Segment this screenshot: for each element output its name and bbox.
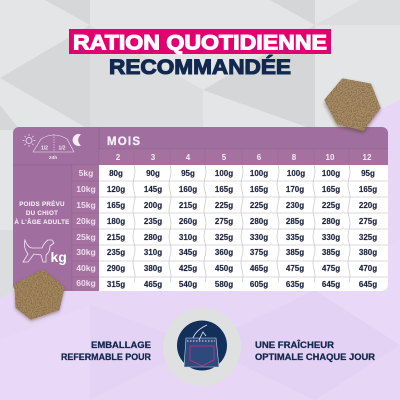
- row 25kg values: 310g: [179, 233, 197, 242]
- side label: expected adult weight: À L'ÂGE ADULTE: [14, 219, 70, 226]
- row 10kg values: 165g: [322, 185, 340, 194]
- row 15kg values: 230g: [286, 201, 304, 210]
- side label: expected adult weight: POIDS PRÉVU: [19, 200, 65, 208]
- row 30kg values: 310g: [144, 248, 162, 257]
- caption right: UNE FRAÎCHEUR: [255, 339, 335, 350]
- row 20kg values: 260g: [179, 217, 197, 226]
- table header: months: 3: [151, 153, 156, 162]
- row 30kg values: 375g: [250, 248, 268, 257]
- weight column: 30kg: [76, 247, 96, 257]
- row 30kg values: 360g: [215, 248, 233, 257]
- row 15kg values: 165g: [107, 201, 125, 210]
- navy circle: [177, 320, 227, 370]
- row 5kg values: 100g: [287, 169, 305, 178]
- row 60kg values: 580g: [215, 280, 233, 289]
- pouch: [184, 338, 219, 367]
- title highlight: ration quotidienne: RATION QUOTIDIENNE: [73, 32, 327, 54]
- row 25kg values: 335g: [286, 233, 304, 242]
- icon: day and night half split: 1/2: [59, 146, 66, 152]
- icon: dog with kg: kg: [50, 249, 67, 265]
- row 25kg values: 325g: [359, 233, 377, 242]
- white table body: [99, 165, 388, 291]
- row 20kg values: 285g: [286, 217, 304, 226]
- table header: months: 4: [186, 153, 191, 162]
- row 40kg values: 380g: [144, 264, 162, 273]
- title second line: recommandée: RECOMMANDÉE: [109, 56, 291, 79]
- row 10kg values: 165g: [250, 185, 268, 194]
- row 20kg values: 275g: [215, 217, 233, 226]
- table header: months: 8: [292, 153, 297, 162]
- row 15kg values: 225g: [322, 201, 340, 210]
- row 5kg values: 100g: [215, 169, 233, 178]
- weight column: 5kg: [79, 168, 93, 178]
- row 20kg values: [107, 217, 377, 226]
- row 10kg values: [107, 185, 377, 194]
- table header: months: [13, 127, 388, 165]
- row 40kg values: 425g: [179, 264, 197, 273]
- row 30kg values: 380g: [359, 248, 377, 257]
- row 60kg values: 635g: [286, 280, 304, 289]
- row 15kg values: 220g: [359, 201, 377, 210]
- side label: expected adult weight: DU CHIOT: [26, 210, 58, 217]
- table header: months: 2: [116, 153, 121, 162]
- row 10kg values: 165g: [215, 185, 233, 194]
- table panel: [13, 127, 388, 291]
- kibble: bottom left: [16, 271, 63, 320]
- row 5kg values: 95g: [181, 169, 195, 178]
- row 5kg values: 80g: [109, 169, 123, 178]
- row 60kg values: 645g: [359, 280, 377, 289]
- table header: months: 6: [257, 153, 262, 162]
- caption left: [61, 340, 151, 362]
- row 20kg values: 275g: [359, 217, 377, 226]
- weight column: 20kg: [76, 216, 96, 226]
- row 30kg values: 235g: [107, 248, 125, 257]
- side label: expected adult weight: [14, 200, 70, 226]
- row 5kg values: [109, 169, 375, 178]
- weight column: 40kg: [76, 263, 96, 273]
- icon: day and night half split: 24h: [49, 155, 57, 161]
- table header: months: 12: [363, 153, 372, 162]
- row 10kg values: 165g: [359, 185, 377, 194]
- hand outline: [193, 325, 207, 340]
- row 5kg values: 95g: [361, 169, 375, 178]
- row 20kg values: 180g: [107, 217, 125, 226]
- row 15kg values: 225g: [215, 201, 233, 210]
- icon: resealable pack: [163, 308, 241, 386]
- kibble: top right: [326, 80, 379, 132]
- row 60kg values: 465g: [144, 280, 162, 289]
- row 5kg values: 100g: [322, 169, 340, 178]
- table header: months: 5: [222, 153, 227, 162]
- row 30kg values: 345g: [179, 248, 197, 257]
- row 40kg values: 290g: [107, 264, 125, 273]
- row 25kg values: 325g: [215, 233, 233, 242]
- icon: dog with kg: [23, 240, 67, 265]
- row 20kg values: 280g: [250, 217, 268, 226]
- table grid lines: [99, 181, 388, 277]
- weight column: 60kg: [76, 278, 96, 288]
- row 25kg values: 215g: [107, 233, 125, 242]
- row 15kg values: [107, 201, 377, 210]
- row 25kg values: [107, 233, 377, 242]
- weight column: 25kg: [76, 232, 96, 242]
- row 15kg values: 215g: [179, 201, 197, 210]
- table header: months: MOIS: [107, 136, 141, 148]
- row 60kg values: 315g: [107, 280, 125, 289]
- row 10kg values: 170g: [286, 185, 304, 194]
- icon: day and night half split: [22, 134, 81, 161]
- pink inner outline: [190, 346, 214, 366]
- row 40kg values: 475g: [286, 264, 304, 273]
- row 15kg values: 200g: [144, 201, 162, 210]
- table header: months: 10: [326, 153, 335, 162]
- row 40kg values: 450g: [215, 264, 233, 273]
- row 20kg values: 235g: [144, 217, 162, 226]
- row 25kg values: 330g: [250, 233, 268, 242]
- row 40kg values: 465g: [250, 264, 268, 273]
- row 60kg values: 605g: [250, 280, 268, 289]
- row 5kg values: 100g: [250, 169, 268, 178]
- row 15kg values: 225g: [250, 201, 268, 210]
- caption left: EMBALLAGE: [91, 340, 151, 350]
- title: [69, 29, 331, 79]
- caption right: OPTIMALE CHAQUE JOUR: [255, 352, 376, 362]
- row 60kg values: 540g: [179, 280, 197, 289]
- feeding table: [13, 127, 388, 291]
- caption right: [255, 339, 376, 362]
- row 5kg values: 90g: [146, 169, 160, 178]
- row 30kg values: 385g: [286, 248, 304, 257]
- row 10kg values: 145g: [144, 185, 162, 194]
- row 60kg values: 645g: [322, 280, 340, 289]
- row 30kg values: [107, 248, 377, 257]
- weight column: [72, 165, 99, 291]
- weight column: 15kg: [76, 200, 96, 210]
- row 40kg values: 475g: [322, 264, 340, 273]
- row 10kg values: 120g: [107, 185, 125, 194]
- row 25kg values: 330g: [322, 233, 340, 242]
- row 10kg values: 160g: [179, 185, 197, 194]
- weight column: 10kg: [76, 184, 96, 194]
- icon: day and night half split: 1/2: [41, 146, 48, 152]
- caption left: REFERMABLE POUR: [61, 352, 151, 362]
- row 60kg values: [107, 280, 377, 289]
- circle halo: [163, 308, 241, 386]
- row 40kg values: [107, 264, 377, 273]
- row 25kg values: 280g: [144, 233, 162, 242]
- row 40kg values: 470g: [359, 264, 377, 273]
- row 20kg values: 280g: [322, 217, 340, 226]
- row 30kg values: 385g: [322, 248, 340, 257]
